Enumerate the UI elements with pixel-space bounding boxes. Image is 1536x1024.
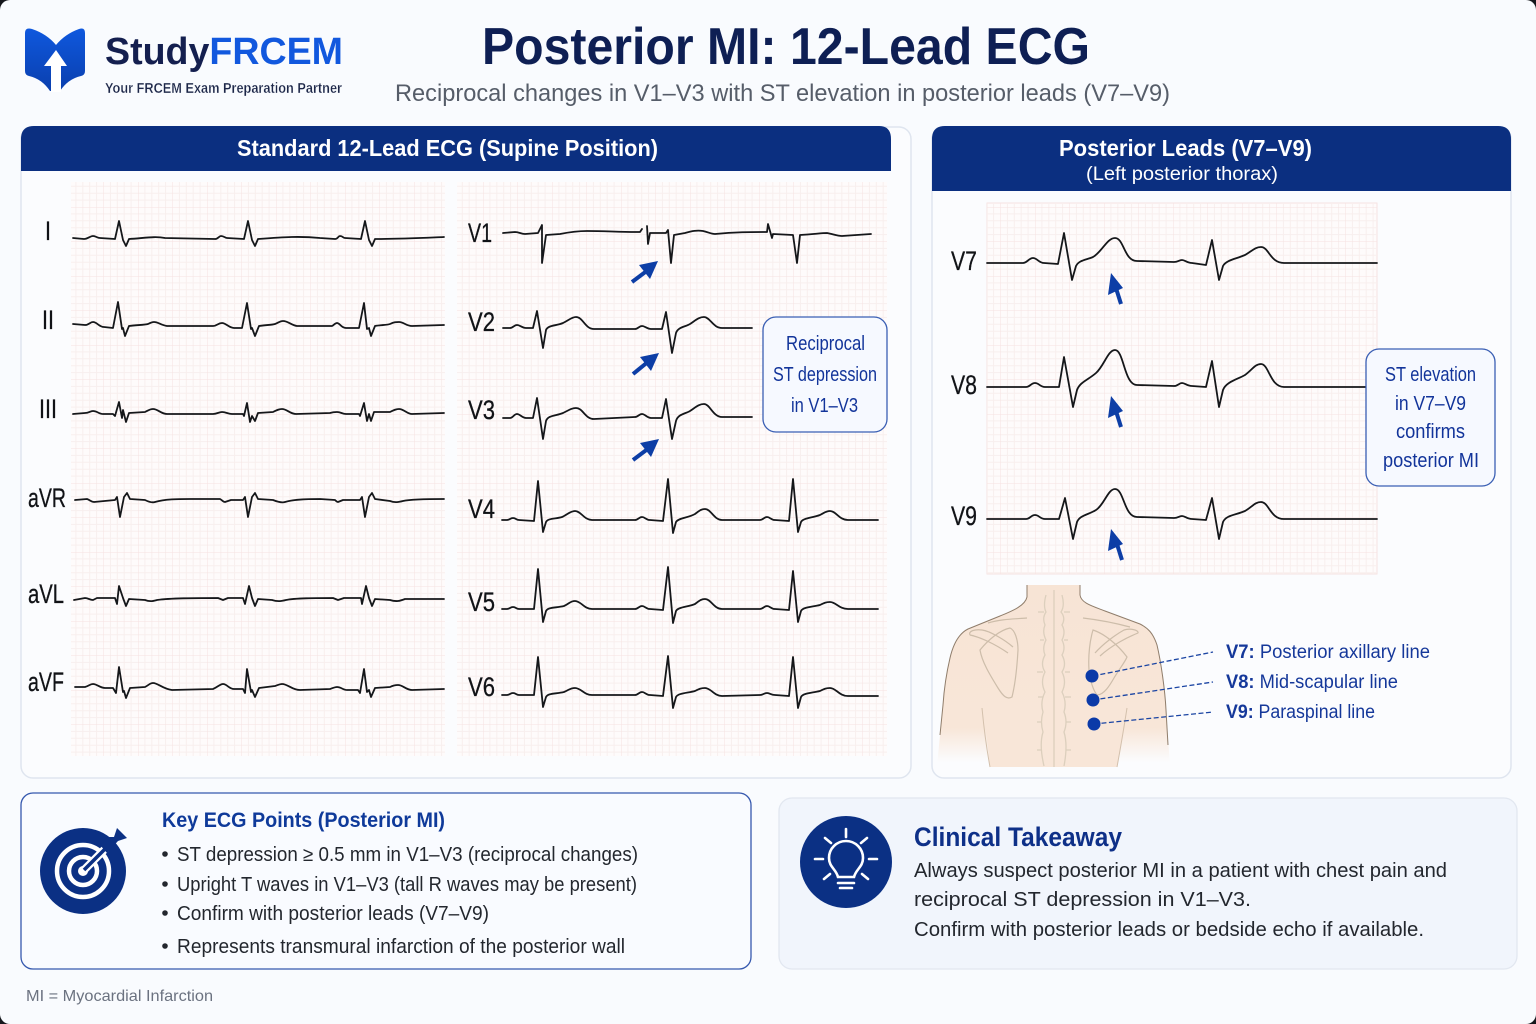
panel sub-heading: (Left posterior thorax)	[1086, 164, 1278, 185]
lead I: I	[45, 216, 51, 246]
bullet list: Upright T waves in V1–V3 (tall R waves may be present)	[177, 874, 637, 896]
logo	[25, 28, 343, 97]
lead II	[42, 302, 444, 336]
callout: ST elevation confirms posterior MI: in V7–V9	[1395, 393, 1466, 415]
lead V8	[951, 350, 1368, 407]
lead V7	[951, 233, 1377, 280]
lead V1: V1	[468, 218, 492, 248]
lead aVL	[28, 579, 444, 609]
arrow: V9 ST elevation	[1108, 529, 1123, 560]
callout: ST elevation confirms posterior MI: ST elevation	[1385, 364, 1476, 386]
lead aVR: aVR	[28, 483, 66, 513]
panel heading: Posterior Leads (V7–V9)	[1059, 135, 1312, 161]
lead V2: V2	[468, 307, 495, 337]
lead V5: V5	[468, 587, 495, 617]
takeaway text: Always suspect posterior MI in a patient with chest pain and	[914, 860, 1447, 882]
subtitle: Reciprocal changes in V1–V3 with ST elevation in posterior leads (V7–V9)	[395, 80, 1170, 107]
icon: open book with upward arrow	[25, 28, 85, 92]
lead aVL: aVL	[28, 579, 64, 609]
clavicles and scapular spines	[970, 618, 1138, 656]
lead I	[45, 216, 444, 246]
callout: reciprocal ST depression	[763, 317, 887, 432]
panel: key ECG points	[21, 793, 751, 969]
title: Posterior MI: 12-Lead ECG	[482, 18, 1090, 76]
callout: reciprocal ST depression: ST depression	[773, 364, 877, 386]
takeaway text: Confirm with posterior leads or bedside echo if available.	[914, 919, 1424, 941]
arrow: V2 ST depression	[633, 353, 659, 374]
electrode positions and leader lines	[1086, 652, 1213, 730]
lead V7: V7	[951, 246, 977, 276]
lead V3	[468, 395, 752, 439]
callout: ST elevation confirms posterior MI	[1366, 349, 1495, 486]
footnote: MI = Myocardial Infarction	[26, 988, 213, 1005]
lead V4: V4	[468, 494, 495, 524]
callout: reciprocal ST depression: Reciprocal	[786, 333, 865, 355]
icon: light bulb	[800, 816, 892, 908]
icon: target with dart	[40, 828, 127, 914]
callout: reciprocal ST depression: in V1–V3	[791, 395, 858, 417]
back anatomy illustration	[937, 585, 1170, 767]
right scapula	[1089, 630, 1127, 695]
lead V5	[468, 567, 878, 623]
lead V3: V3	[468, 395, 495, 425]
panel heading bar	[21, 126, 891, 171]
skin silhouette	[937, 585, 1170, 766]
bullet list	[162, 844, 638, 958]
lead III: III	[39, 394, 57, 424]
body outline	[940, 585, 1168, 745]
lead aVF: aVF	[28, 667, 64, 697]
heading: Key ECG Points (Posterior MI)	[162, 809, 445, 832]
lead V4	[468, 479, 878, 533]
lead II: II	[42, 305, 54, 335]
lead aVR	[28, 483, 444, 517]
panel heading bar	[932, 126, 1511, 191]
label: V7 position: V7: Posterior axillary line	[1226, 642, 1430, 663]
panel: posterior leads	[932, 126, 1511, 778]
callout: ST elevation confirms posterior MI: posterior MI	[1383, 450, 1479, 472]
panel: clinical takeaway	[779, 798, 1517, 969]
chest lead grid	[457, 182, 887, 756]
tagline: Your FRCEM Exam Preparation Partner	[105, 81, 342, 97]
torso	[983, 705, 1127, 767]
lead V9	[951, 489, 1377, 539]
lead III	[39, 394, 444, 424]
label: V8 position: V8: Mid-scapular line	[1226, 672, 1398, 693]
panel heading: Standard 12-Lead ECG (Supine Position)	[237, 135, 658, 161]
takeaway text	[914, 860, 1447, 941]
callout: ST elevation confirms posterior MI: confirms	[1396, 421, 1465, 443]
bullet list: Represents transmural infarction of the posterior wall	[177, 936, 625, 958]
arrow: V1 ST depression	[632, 261, 658, 282]
lead V1	[468, 218, 871, 263]
spine	[1037, 590, 1071, 767]
bullet list: Confirm with posterior leads (V7–V9)	[177, 903, 489, 925]
left scapula	[980, 628, 1018, 698]
limb lead grid	[71, 182, 445, 756]
brand name: StudyFRCEM	[105, 31, 343, 73]
panel: standard 12-lead ECG	[21, 126, 911, 778]
arrow: V7 ST elevation	[1108, 273, 1123, 304]
posterior lead grid	[987, 203, 1377, 574]
heading: Clinical Takeaway	[914, 822, 1122, 852]
lead V2	[468, 307, 752, 353]
takeaway text: reciprocal ST depression in V1–V3.	[914, 889, 1251, 911]
lead aVF	[28, 667, 444, 698]
arrow: V3 ST depression	[633, 439, 659, 460]
lead V6: V6	[468, 672, 495, 702]
label: V9 position: V9: Paraspinal line	[1226, 702, 1375, 723]
lead V8: V8	[951, 370, 977, 400]
lead V6	[468, 656, 878, 708]
arrow: V8 ST elevation	[1108, 396, 1123, 427]
bullet list: ST depression ≥ 0.5 mm in V1–V3 (reciprocal changes)	[177, 844, 638, 866]
lead V9: V9	[951, 501, 977, 531]
